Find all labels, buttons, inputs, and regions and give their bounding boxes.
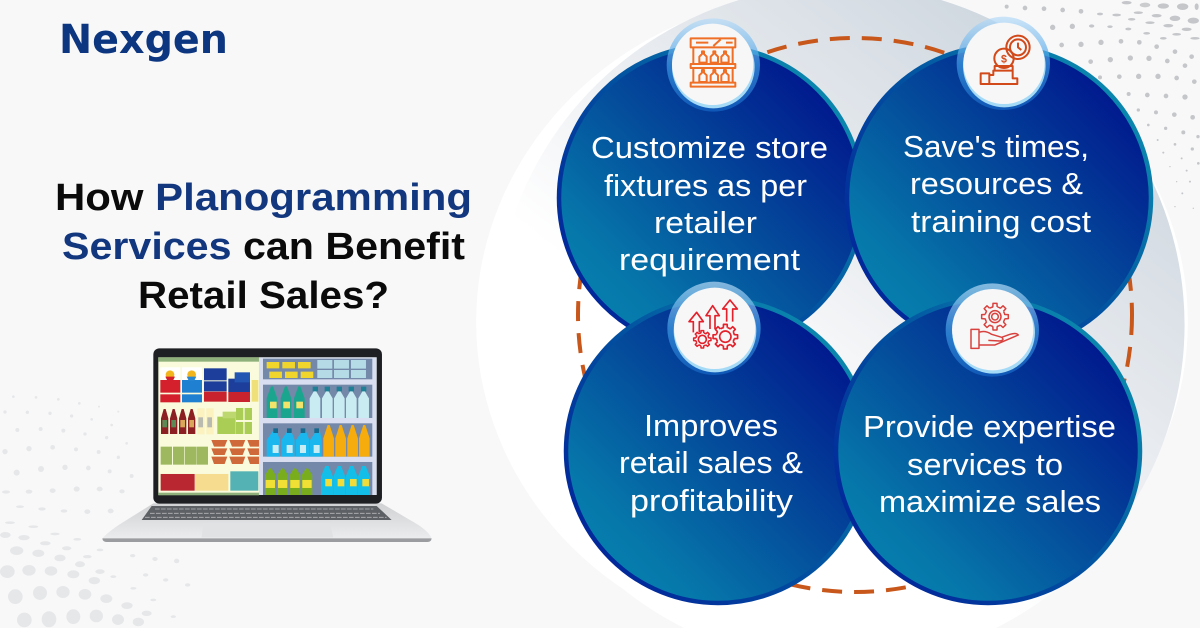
icon: coins and clock in hand	[957, 17, 1050, 110]
panel: save time and cost	[847, 46, 1151, 350]
halftone dots: top right	[1005, 1, 1200, 209]
panel: provide expertise	[836, 299, 1140, 603]
dashed orbit ring	[578, 38, 1132, 592]
title: How Planogramming	[55, 177, 472, 219]
text: customize store fixtures: retailer	[654, 205, 757, 240]
title: Retail Sales?	[138, 275, 389, 317]
text: save time and cost: training cost	[911, 204, 1091, 239]
halftone dots: bottom left	[0, 395, 190, 627]
title	[55, 177, 472, 317]
right planogram shelves	[259, 357, 377, 495]
text: save time and cost: resources &	[910, 166, 1083, 201]
screen	[158, 357, 377, 495]
text: improves retail sales: Improves	[644, 408, 778, 443]
text: provide expertise: Provide expertise	[863, 409, 1116, 444]
icon: store shelves	[667, 18, 760, 112]
text: improves retail sales: profitability	[630, 483, 794, 518]
title: Services can Benefit	[62, 226, 465, 268]
text: save time and cost	[903, 129, 1091, 239]
text: customize store fixtures	[591, 130, 828, 277]
icon: gear over open hand	[946, 283, 1039, 377]
text: customize store fixtures: fixtures as per	[604, 168, 807, 203]
text: save time and cost: Save's times,	[903, 129, 1089, 164]
left planogram shelves	[160, 367, 259, 491]
large background disc	[476, 0, 1188, 628]
text: customize store fixtures: requirement	[619, 242, 800, 277]
text: provide expertise: services to	[907, 447, 1063, 482]
laptop with planogram screen	[102, 348, 432, 542]
icon: coins and clock in hand: $	[1001, 53, 1007, 65]
text: provide expertise	[863, 409, 1116, 519]
text: improves retail sales: retail sales &	[619, 445, 803, 480]
icon: arrows and gears	[667, 282, 761, 375]
logo: Nexgen: Nexgen	[59, 17, 228, 63]
text: improves retail sales	[619, 408, 803, 518]
text: provide expertise: maximize sales	[879, 484, 1101, 519]
laptop base	[102, 503, 432, 542]
laptop lid	[153, 348, 382, 504]
panel: customize store fixtures	[559, 46, 863, 350]
panel: improves retail sales	[566, 299, 870, 603]
text: customize store fixtures: Customize store	[591, 130, 828, 165]
